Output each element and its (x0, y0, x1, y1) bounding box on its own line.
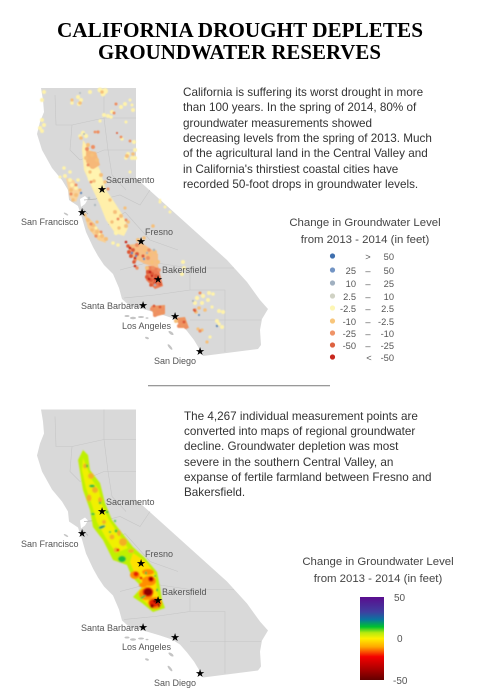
divider (148, 385, 330, 386)
legend values: < (366, 353, 372, 363)
legend values: – (365, 329, 371, 339)
city names: lower map: Sacramento (106, 497, 155, 507)
legend title: from 2013 - 2014 (in feet) (301, 234, 429, 246)
city markers: upper map: ★ (97, 184, 107, 196)
title: GROUNDWATER RESERVES (98, 40, 381, 64)
legend values: – (365, 292, 371, 302)
city names: upper map: San Diego (154, 356, 196, 366)
intro text block: than 100 years. In the spring of 2014, 80% of (183, 101, 416, 114)
second text block: The 4,267 individual measurement points are (184, 410, 418, 423)
city markers: lower map: ★ (97, 506, 107, 518)
city names: lower map: San Diego (154, 678, 196, 688)
city markers: upper map: ★ (136, 236, 146, 248)
second text block: decline. Groundwater depletion was most (184, 440, 398, 453)
legend values: -25 (381, 341, 394, 351)
second text block: expanse of fertile farmland between Fresno and (184, 471, 432, 484)
city names: lower map: San Francisco (21, 539, 79, 549)
city markers: upper map: ★ (138, 300, 148, 312)
legend: point categories (289, 217, 441, 363)
city names: upper map: Bakersfield (162, 265, 207, 275)
legend values: 50 (384, 266, 394, 276)
legend values: -2.5 (340, 304, 356, 314)
scale labels: 0 (397, 634, 403, 645)
map: interpolated regional decline (37, 410, 268, 678)
legend values: -50 (381, 353, 394, 363)
legend values: > (365, 252, 371, 262)
legend values: -10 (343, 317, 356, 327)
scale labels (393, 593, 408, 687)
legend values: 10 (384, 292, 394, 302)
city names: lower map: Los Angeles (122, 642, 172, 652)
interpolated groundwater surface (78, 450, 165, 612)
scale title: Change in Groundwater Level (302, 556, 454, 568)
city names: upper map: Sacramento (106, 175, 155, 185)
city names: lower map: Santa Barbara (81, 623, 139, 633)
legend values: -10 (381, 329, 394, 339)
intro text block: recorded 50-foot drops in groundwater levels. (183, 178, 418, 191)
second text block: severe in the southern Central Valley, an (184, 456, 393, 469)
intro text block: California is suffering its worst drought in more (183, 86, 423, 99)
city markers: lower map: ★ (170, 632, 180, 644)
measurement point blobs (38, 88, 225, 344)
legend: color scale (302, 556, 454, 687)
city markers: upper map: ★ (153, 274, 163, 286)
city names: lower map: Bakersfield (162, 587, 207, 597)
intro text block: groundwater measurements showed (183, 117, 372, 130)
city names: lower map (21, 497, 207, 688)
legend values: – (365, 266, 371, 276)
legend values: 25 (384, 279, 394, 289)
legend values: 10 (346, 279, 356, 289)
legend values: 50 (384, 252, 394, 262)
legend values: – (365, 279, 371, 289)
legend values (340, 252, 394, 363)
legend values: – (365, 341, 371, 351)
city markers: upper map: ★ (170, 311, 180, 323)
color bar (360, 597, 384, 680)
legend title (289, 217, 441, 246)
legend values: 2.5 (381, 304, 394, 314)
city names: upper map: Fresno (145, 227, 173, 237)
city names: upper map: San Francisco (21, 217, 79, 227)
second text block: converted into maps of regional groundwater (184, 425, 415, 438)
city names: lower map: Fresno (145, 549, 173, 559)
second text block: Bakersfield. (184, 486, 245, 499)
legend swatches (330, 253, 335, 360)
scale title: from 2013 - 2014 (in feet) (314, 573, 442, 585)
city markers: lower map: ★ (138, 622, 148, 634)
scale labels: -50 (393, 676, 408, 687)
legend values: 2.5 (343, 292, 356, 302)
legend title: Change in Groundwater Level (289, 217, 441, 229)
scale labels: 50 (394, 593, 406, 604)
map: 2014 measurement points (37, 88, 268, 356)
title: CALIFORNIA DROUGHT DEPLETES (57, 18, 423, 42)
legend values: -2.5 (378, 317, 394, 327)
intro text block: of the agricultural land in the Central Valley and (183, 147, 428, 160)
city markers: lower map: ★ (136, 558, 146, 570)
city markers: lower map: ★ (195, 668, 205, 680)
city markers: upper map: ★ (195, 346, 205, 358)
city markers: lower map: ★ (153, 595, 163, 607)
legend values: – (365, 304, 371, 314)
scale title (302, 556, 454, 585)
intro text block: decreasing levels from the spring of 2013. Much (183, 132, 432, 145)
title (57, 18, 423, 64)
legend values: – (365, 317, 371, 327)
intro text block: in California's thirstiest coastal cities have (183, 163, 398, 176)
city markers: upper map (77, 184, 205, 358)
second text block (184, 410, 432, 499)
legend values: -50 (343, 341, 356, 351)
city names: upper map: Santa Barbara (81, 301, 139, 311)
city markers: lower map: ★ (77, 528, 87, 540)
intro text block (183, 86, 432, 191)
legend values: 25 (346, 266, 356, 276)
legend values: -25 (343, 329, 356, 339)
city markers: upper map: ★ (77, 207, 87, 219)
city names: upper map (21, 175, 207, 366)
city names: upper map: Los Angeles (122, 321, 172, 331)
city markers: lower map (77, 506, 205, 680)
